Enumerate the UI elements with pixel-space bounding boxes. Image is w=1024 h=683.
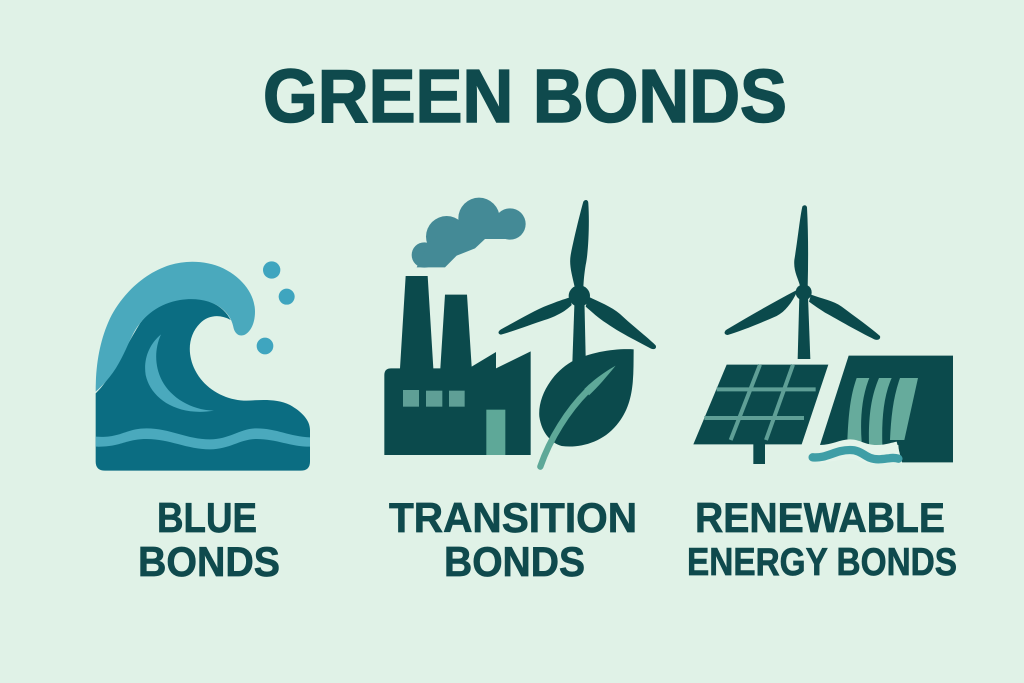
wave crest: [96, 262, 255, 392]
label: transition bonds: TRANSITION: [389, 494, 637, 541]
wave crescent: [145, 334, 214, 412]
waterfall streams: [847, 378, 918, 445]
factory: [384, 276, 531, 455]
label: renewable energy bonds: ENERGY BONDS: [687, 541, 957, 584]
label: blue bonds: BONDS: [138, 538, 280, 585]
factory windows: [403, 390, 465, 407]
wave body: [96, 298, 310, 471]
label: blue bonds: [138, 494, 280, 585]
water ripple: [813, 450, 898, 459]
solar panel: [693, 365, 828, 444]
label: blue bonds: BLUE: [157, 494, 257, 541]
wave band: [96, 428, 310, 449]
smoke cloud: [412, 198, 526, 268]
hydro dam: [820, 356, 953, 462]
water droplets: [257, 261, 295, 354]
title: GREEN BONDS: [263, 54, 787, 138]
icon: renewable energy: [693, 205, 953, 464]
leaf: [539, 349, 634, 447]
icon: ocean wave: [96, 261, 310, 471]
leaf stem: [540, 392, 587, 467]
icon: factory, wind turbine and leaf: [384, 198, 656, 467]
solar panel grid: [704, 365, 816, 440]
label: transition bonds: BONDS: [444, 538, 585, 585]
label: transition bonds: [389, 494, 637, 585]
wind turbine: [725, 205, 880, 359]
wind turbine: [498, 200, 656, 363]
label: renewable energy bonds: [687, 494, 957, 584]
foam: [818, 439, 902, 464]
label: renewable energy bonds: RENEWABLE: [695, 494, 945, 541]
factory door: [486, 410, 505, 455]
solar panel post: [753, 443, 765, 464]
